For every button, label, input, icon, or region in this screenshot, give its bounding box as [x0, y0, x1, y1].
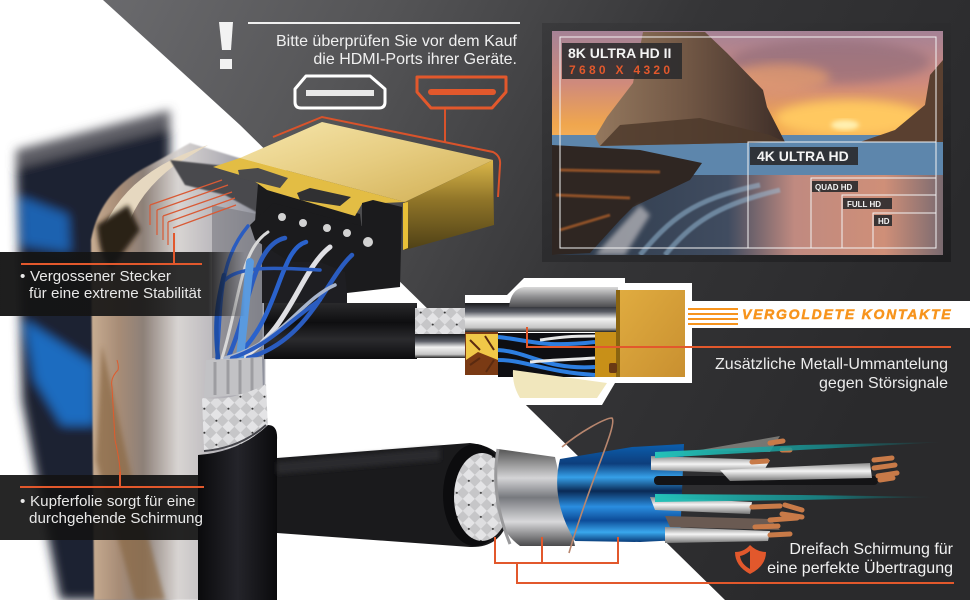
drain wire — [562, 418, 613, 553]
callout: copper foil: Kupferfolie sorgt für eine — [30, 493, 195, 510]
banner: gold contacts — [688, 301, 970, 328]
heading rule and port check note: Bitte überprüfen Sie vor dem Kauf — [276, 33, 518, 50]
horizontal black cable — [264, 303, 467, 359]
callout: molded connector: für eine extreme Stabilität — [29, 285, 202, 302]
callout: triple shielding text — [767, 541, 954, 577]
label: Quad HD — [812, 181, 858, 192]
copper tips — [752, 441, 897, 535]
callout: copper foil — [0, 472, 204, 540]
blurred HDMI plug in background — [16, 110, 170, 600]
callout: copper foil: • — [20, 493, 25, 510]
landscape photo — [552, 31, 943, 255]
blue shield — [557, 444, 684, 542]
heading rule and port check note — [248, 22, 520, 68]
label: HD — [874, 215, 892, 226]
callout: triple shielding text: eine perfekte Übertragung — [767, 559, 953, 577]
icon: orange HDMI port — [417, 77, 506, 108]
straight connector cutaway — [465, 278, 692, 405]
callout: copper foil: durchgehende Schirmung — [29, 510, 203, 527]
label: Full HD: FULL HD — [847, 200, 881, 209]
jacket — [277, 443, 508, 547]
foil — [496, 449, 575, 546]
label: Full HD — [843, 198, 892, 209]
callout: triple shielding text: Dreifach Schirmung für — [789, 541, 954, 558]
panel: resolution comparison screen — [542, 23, 951, 262]
icon: white HDMI port — [295, 76, 385, 108]
foil and braid of angled cable — [202, 357, 268, 450]
open cable: triple shielding — [277, 418, 945, 553]
callout: molded connector: Vergossener Stecker — [30, 268, 171, 285]
callout: metal sheathing — [527, 327, 951, 392]
callout: metal sheathing: Zusätzliche Metall-Ummantelung — [715, 356, 948, 373]
label: 8K: 7680 X 4320 — [569, 63, 673, 77]
orange leader to gold connector — [273, 109, 500, 197]
callout: molded connector — [0, 233, 245, 316]
angled connector body — [91, 143, 265, 600]
label: 4K: 4K ULTRA HD — [757, 148, 849, 164]
internal wires of angled connector — [216, 226, 352, 358]
wires — [654, 476, 878, 485]
resolution frames — [560, 37, 936, 248]
teal light rays — [655, 442, 945, 458]
heading rule and port check note: die HDMI-Ports ihrer Geräte. — [313, 51, 517, 68]
label: Quad HD: QUAD HD — [815, 183, 853, 192]
gold HDMI connector — [213, 122, 494, 303]
orange bracket — [495, 537, 954, 583]
label: 8K: 8K ULTRA HD II — [568, 45, 671, 61]
braid — [454, 453, 510, 541]
vertical black cable — [198, 425, 277, 600]
warning exclamation icon — [219, 22, 233, 69]
label: 8K — [562, 43, 682, 79]
label: HD: HD — [878, 217, 890, 226]
icon: shield — [735, 545, 766, 574]
banner: gold contacts: VERGOLDETE KONTAKTE — [742, 306, 952, 322]
callout: metal sheathing: gegen Störsignale — [819, 375, 948, 392]
callout: molded connector: • — [20, 268, 25, 285]
